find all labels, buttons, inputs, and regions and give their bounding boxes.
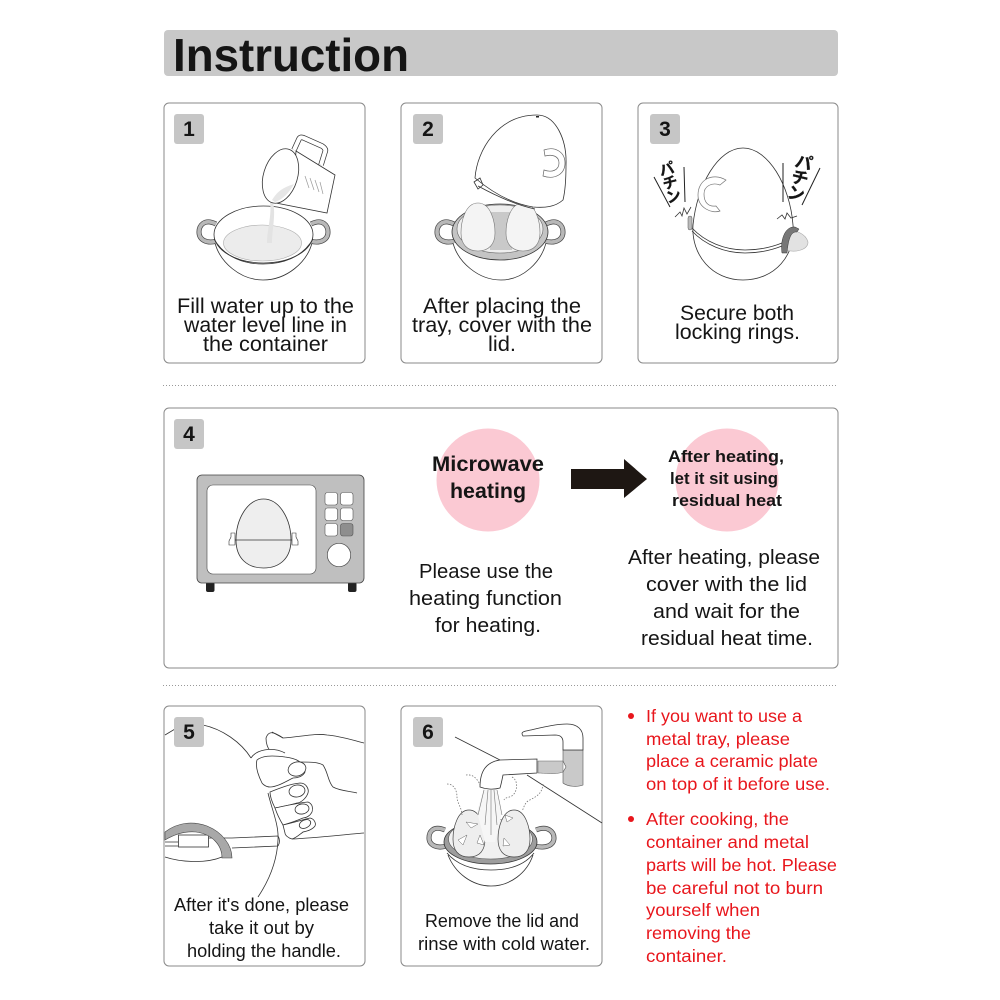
title bar: Instruction	[173, 29, 409, 81]
panel: step 6	[401, 706, 602, 966]
text: residual heat wait: and wait for the	[653, 601, 800, 623]
note: hot container: be careful not to burn	[646, 878, 823, 898]
note: hot container	[628, 809, 837, 966]
note: hot container: yourself when	[646, 900, 760, 920]
circle label: residual heat: After heating,	[668, 447, 784, 466]
icon: sound effect left: チ	[661, 173, 680, 194]
text: step 6: rinse with cold water.	[418, 934, 590, 954]
note: hot container: removing the	[646, 923, 751, 943]
badge: 3	[650, 114, 680, 144]
icon: sound effect left: パ	[658, 160, 676, 180]
note: hot container: parts will be hot. Please	[646, 855, 837, 875]
badge: 1	[174, 114, 204, 144]
icon: bowl with water and jug	[199, 137, 335, 280]
icon: lid opening over bowl with eggs	[437, 115, 566, 280]
text: step 3: locking rings.	[675, 321, 800, 344]
text: step 3	[675, 302, 800, 344]
text: step 5: After it's done, please	[174, 895, 349, 915]
text: step 1: Fill water up to the	[177, 295, 354, 318]
circle label: residual heat	[668, 428, 784, 532]
text: heating function: heating function	[409, 588, 562, 610]
icon: sound effect left: ン	[664, 187, 683, 207]
badge: 6: 6	[422, 721, 434, 744]
icon: faucet rinsing eggs	[429, 724, 602, 886]
badge: 1: 1	[183, 118, 195, 141]
text: step 5: take it out by	[209, 918, 314, 938]
icon: microwave	[197, 475, 364, 592]
text: step 5	[174, 895, 349, 961]
text: step 2: lid.	[488, 333, 516, 356]
note: metal tray: metal tray, please	[646, 729, 790, 749]
icon: hand holding handle	[165, 725, 364, 897]
note: hot container: container and metal	[646, 832, 809, 852]
text: step 2: After placing the	[423, 295, 581, 318]
icon: sound effect right: パ	[793, 152, 814, 174]
panel: step 2	[401, 103, 602, 363]
note: hot container: After cooking, the	[646, 809, 789, 829]
text: residual heat wait: residual heat time.	[641, 628, 813, 650]
badge: 2: 2	[422, 118, 434, 141]
icon: locked egg cooker	[675, 148, 808, 280]
circle label: residual heat: residual heat	[672, 491, 782, 510]
note: hot container: container.	[646, 946, 727, 966]
icon: sound effect right: チ	[789, 167, 810, 190]
text: step 1: the container	[203, 333, 328, 356]
circle label: microwave heating: Microwave	[432, 453, 544, 476]
icon: sound effect right: ン	[785, 183, 807, 205]
text: step 3: Secure both	[680, 302, 794, 325]
text: heating function: for heating.	[435, 615, 541, 637]
badge: 6	[413, 717, 443, 747]
notes: red warnings	[628, 706, 837, 966]
text: step 2	[412, 295, 592, 356]
panel: step 5	[164, 706, 365, 966]
circle label: microwave heating	[432, 428, 544, 532]
circle label: residual heat: let it sit using	[670, 469, 778, 488]
arrow	[571, 459, 647, 498]
title bar	[164, 29, 838, 81]
text: step 6	[418, 911, 590, 954]
text: heating function	[409, 561, 562, 637]
panel: step 1	[164, 103, 365, 363]
icon: sound effect left	[654, 160, 685, 207]
text: step 1: water level line in	[183, 314, 347, 337]
text: heating function: Please use the	[419, 561, 553, 583]
note: metal tray: If you want to use a	[646, 706, 802, 726]
note: metal tray	[628, 706, 830, 794]
badge: 4: 4	[183, 423, 195, 446]
text: residual heat wait	[628, 547, 820, 650]
note: metal tray: on top of it before use.	[646, 774, 830, 794]
note: metal tray: place a ceramic plate	[646, 751, 818, 771]
panel: step 3	[638, 103, 838, 363]
panel: step 4	[164, 408, 838, 668]
text: step 1	[177, 295, 354, 356]
badge: 3: 3	[659, 118, 671, 141]
badge: 5: 5	[183, 721, 195, 744]
text: residual heat wait: cover with the lid	[646, 574, 807, 596]
badge: 5	[174, 717, 204, 747]
icon: sound effect right	[783, 152, 820, 205]
badge: 2	[413, 114, 443, 144]
text: step 5: holding the handle.	[187, 941, 341, 961]
circle label: microwave heating: heating	[450, 480, 526, 503]
text: step 6: Remove the lid and	[425, 911, 579, 931]
badge: 4	[174, 419, 204, 449]
text: step 2: tray, cover with the	[412, 314, 592, 337]
text: residual heat wait: After heating, please	[628, 547, 820, 569]
